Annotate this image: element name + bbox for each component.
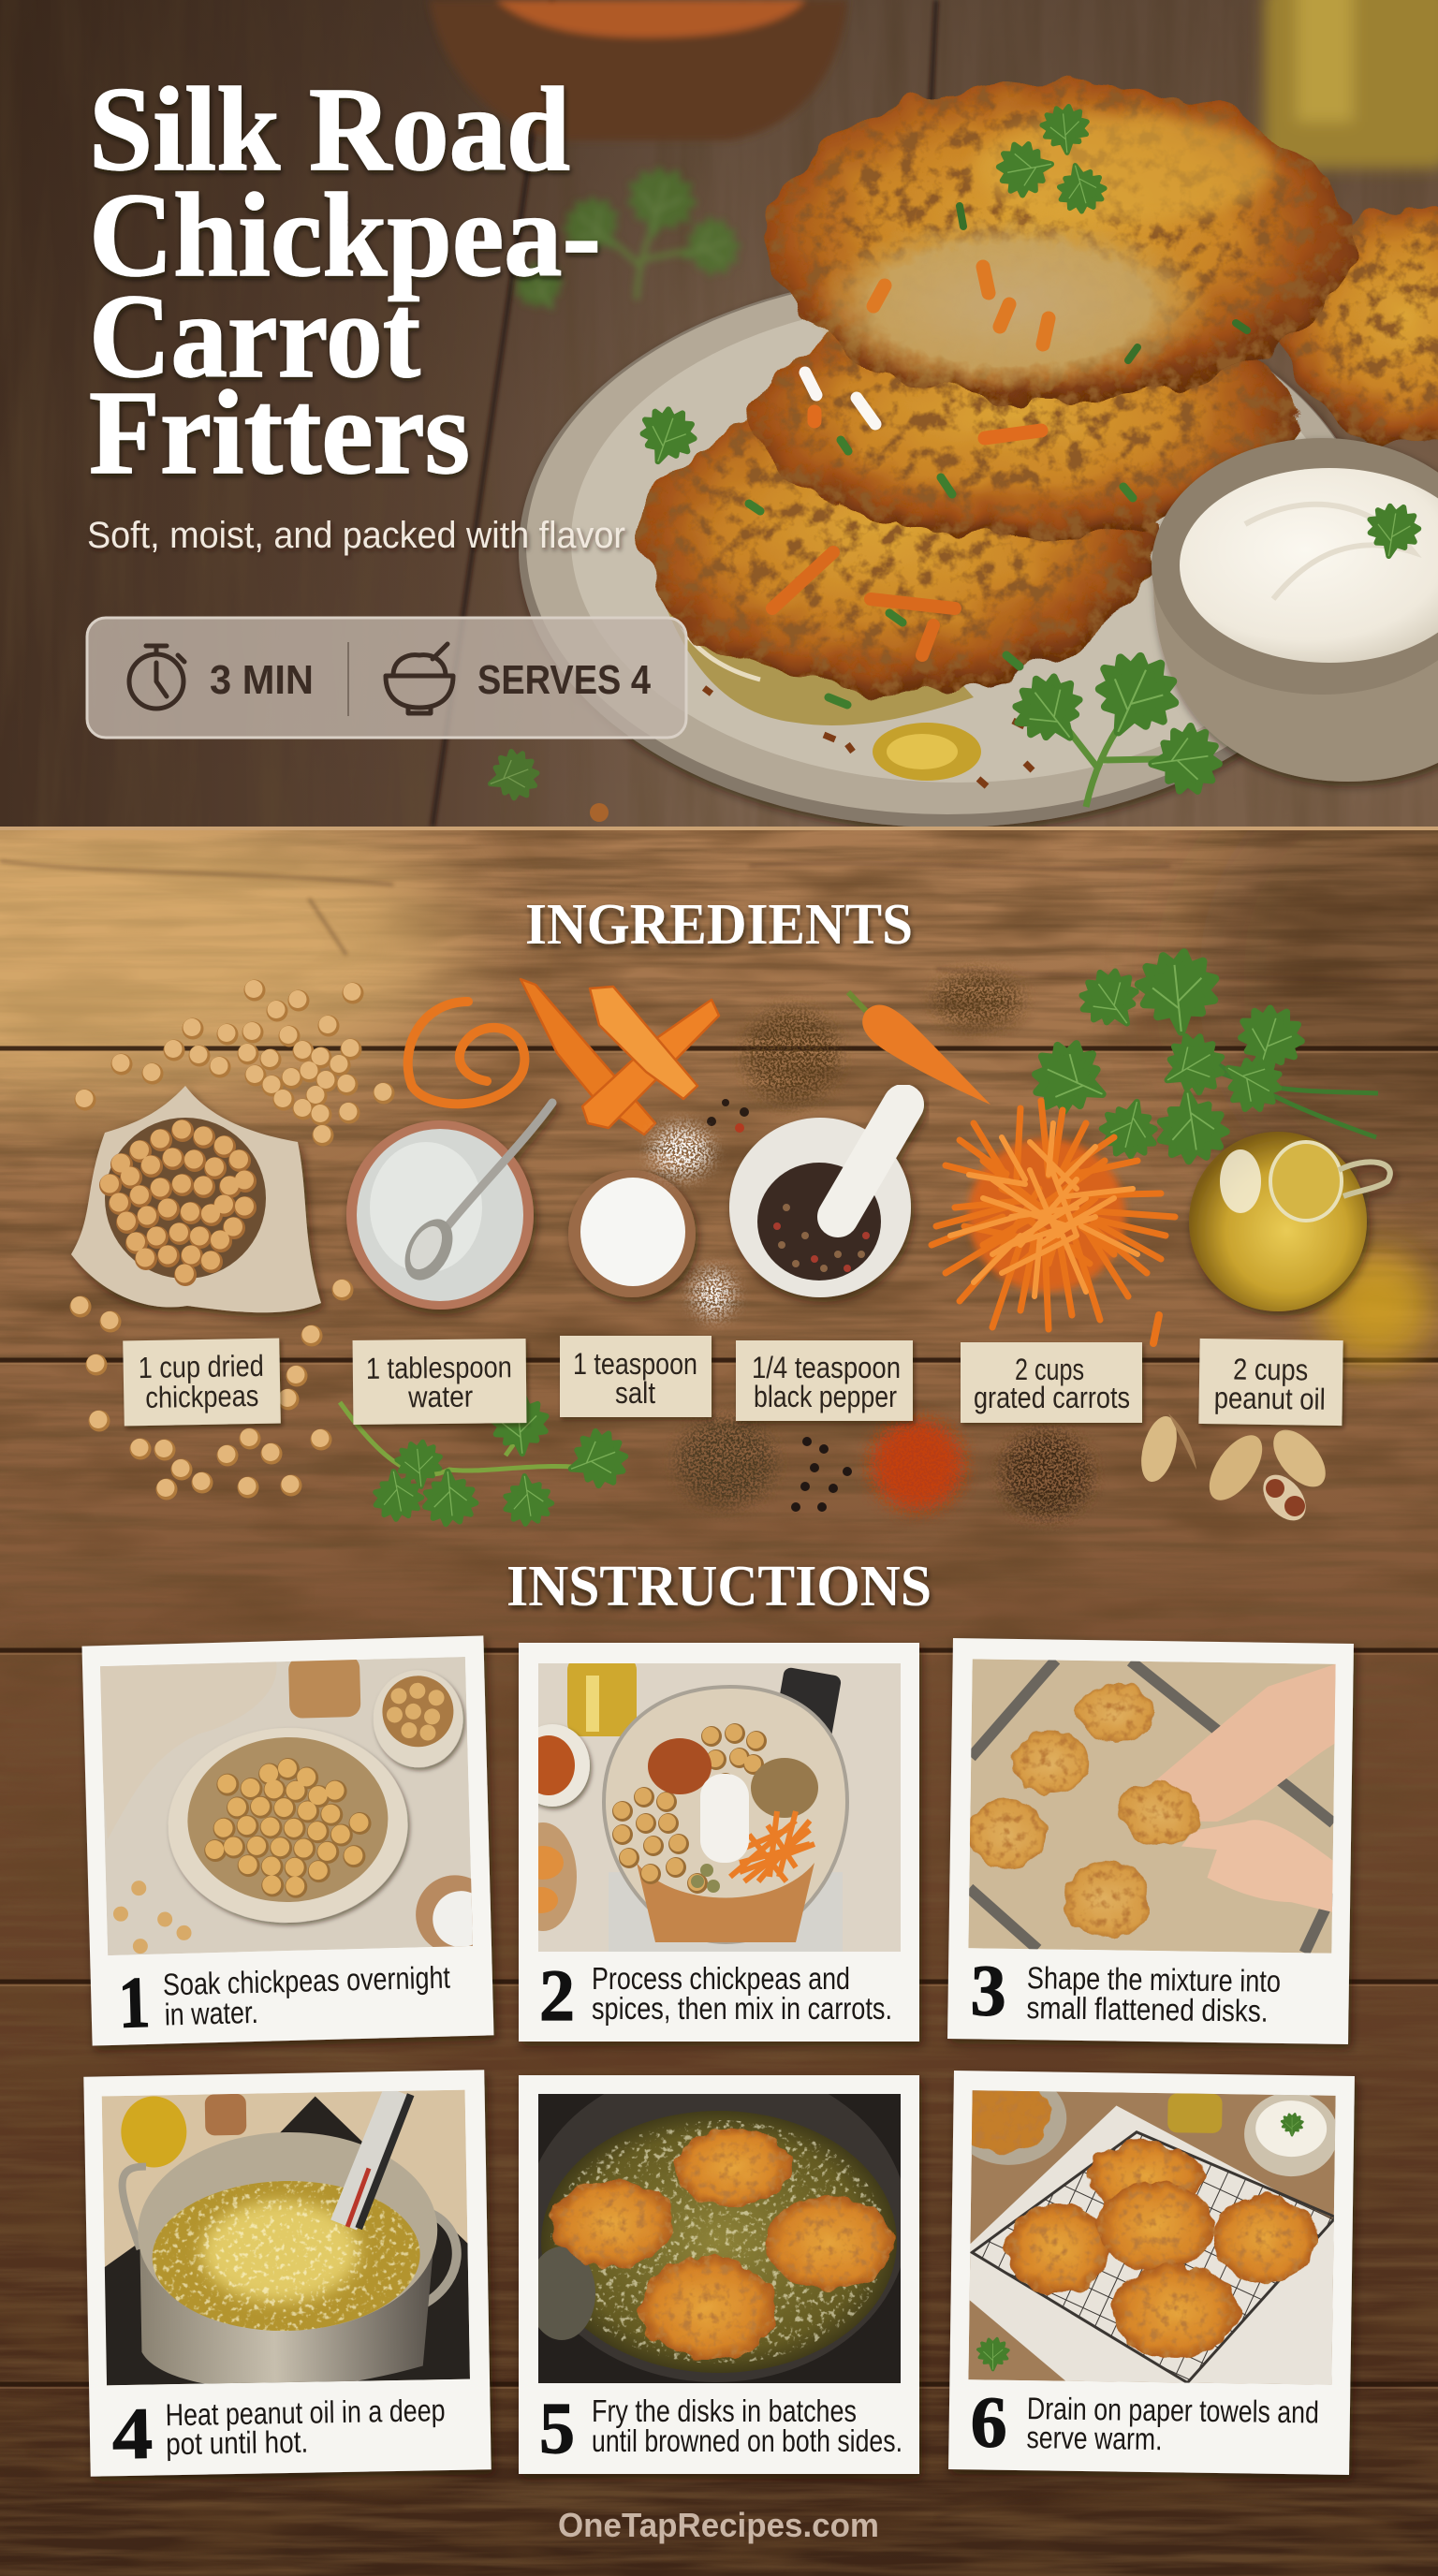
time label: 3 MIN [210,657,314,703]
ingredient label: salt [560,1336,712,1417]
step number 1: 1 [117,1961,152,2043]
ingredient label: carrots [961,1342,1142,1423]
salt bowl [568,1170,696,1297]
ingredient label: peanut oil [1198,1339,1343,1426]
photo: frying disks [524,2064,908,2383]
subtitle: Soft, moist, and packed with flavor [87,515,625,556]
ingredients illustration [71,950,1432,1529]
photo: shaping disks [966,1659,1336,1954]
step card 4 [83,2070,492,2477]
ingredient label: peanut oil: peanut oil [1214,1381,1326,1416]
blurred bowl [429,0,847,140]
spice: paprika [869,1418,966,1512]
step text 3: Shape the mixture into [1027,1960,1281,1998]
photo: draining fritters [946,2071,1339,2385]
step text 1: in water. [164,1995,258,2031]
photo: food processor [509,1657,901,1952]
cilantro sprig [340,1397,632,1527]
step text 6 [1026,2391,1319,2459]
water bowl with spoon [346,1103,552,1310]
crumbs [590,803,609,822]
title: Silk Road [89,63,570,196]
title: Fritters [89,366,470,499]
ingredient label: water [353,1339,526,1425]
step text 6: Drain on paper towels and [1027,2391,1319,2430]
step text 6: serve warm. [1026,2420,1163,2456]
oil puddle [667,599,1033,786]
step text 2: spices, then mix in carrots. [592,1991,892,2026]
step text 5: Fry the disks in batches [592,2393,857,2428]
fritter top [766,82,1350,401]
ingredient label: black pepper: 1/4 teaspoon [752,1351,901,1384]
photo: soaking chickpeas [94,1651,495,1963]
fritter bottom [644,389,1153,705]
ingredient label: chickpeas: 1 cup dried [138,1349,264,1384]
step number 4: 4 [111,2393,154,2474]
title: Carrot [89,270,420,402]
icon: rice bowl [386,644,453,713]
spice: cumin piles [707,973,1021,1133]
step text 4: Heat peanut oil in a deep [165,2393,446,2432]
plate herb [640,406,697,464]
step text 2: Process chickpeas and [592,1961,850,1996]
step text 2 [592,1961,892,2026]
spice: caraway [1002,1431,1092,1517]
yellow oil glow [1320,1250,1432,1362]
step text 3: small flattened disks. [1026,1990,1269,2028]
photo: heating oil [100,2090,470,2392]
parsley on plate [979,611,1258,856]
heading: instructions: INSTRUCTIONS [506,1555,932,1618]
icon: stopwatch [129,646,184,709]
step number 3: 3 [970,1949,1006,2031]
chickpea sack [71,1086,321,1312]
ingredient label: chickpeas [123,1339,281,1426]
step number 5: 5 [539,2387,575,2468]
parsley on table [482,746,543,806]
ingredient label: salt: 1 teaspoon [573,1347,697,1381]
title: Chickpea- [89,168,601,301]
ingredient label: black pepper: black pepper [754,1380,897,1413]
step card 3 [947,1638,1354,2044]
servings label: SERVES 4 [477,657,651,703]
parsley on top fritter [995,105,1108,215]
step text 3 [1026,1960,1281,2028]
ingredient label: peanut oil: 2 cups [1233,1352,1308,1387]
dip bowl [1152,438,1438,782]
ingredient label: salt: salt [615,1376,655,1410]
background: lower wood planks [0,758,1438,2576]
carrot sticks [521,979,719,1134]
fritter back right [1283,208,1438,447]
grated carrots [932,1101,1175,1343]
scattered chickpeas [80,988,384,1489]
footer: website: OneTapRecipes.com [558,2506,879,2544]
step text 4: pot until hot. [166,2424,308,2461]
step text 4 [165,2393,446,2461]
heading: ingredients: INGREDIENTS [525,893,913,957]
blurred oil bottle [1264,0,1438,168]
title [89,63,601,499]
step text 5 [592,2393,902,2458]
step card 1 [81,1635,498,2046]
step card 5 [519,2064,919,2474]
blurred herbs [513,166,741,311]
peanuts [1135,1412,1335,1529]
oil jar [1189,1132,1390,1311]
ingredient label: chickpeas: chickpeas [145,1379,259,1414]
cilantro bunch [1024,950,1378,1164]
carrot curl [408,1002,524,1104]
step number 2: 2 [539,1954,575,2036]
spice: ground pile [677,1419,774,1505]
salt scatter [653,1127,732,1316]
dip parsley [1364,502,1422,561]
step card 6 [946,2071,1355,2475]
hero wood table [0,0,1438,827]
whole carrot [848,992,990,1105]
fritter middle [752,305,1299,537]
step text 5: until browned on both sides. [592,2423,902,2458]
step number 6: 6 [970,2380,1007,2463]
spice: peppercorns [796,1442,847,1507]
badge: time and servings [87,618,686,738]
ingredient label: water: water [407,1380,474,1413]
ingredient label: water: 1 tablespoon [366,1350,512,1385]
ingredient label: carrots: grated carrots [974,1381,1130,1414]
ingredient label: black pepper [736,1340,913,1421]
step card 2 [509,1643,919,2042]
step text 1: Soak chickpeas overnight [162,1960,450,2002]
ingredient label: carrots: 2 cups [1015,1353,1084,1386]
hero panel: fritters photo [0,0,1438,856]
step text 1 [162,1960,451,2032]
plate [519,273,1372,827]
pepper mortar with pestle [729,1105,911,1297]
